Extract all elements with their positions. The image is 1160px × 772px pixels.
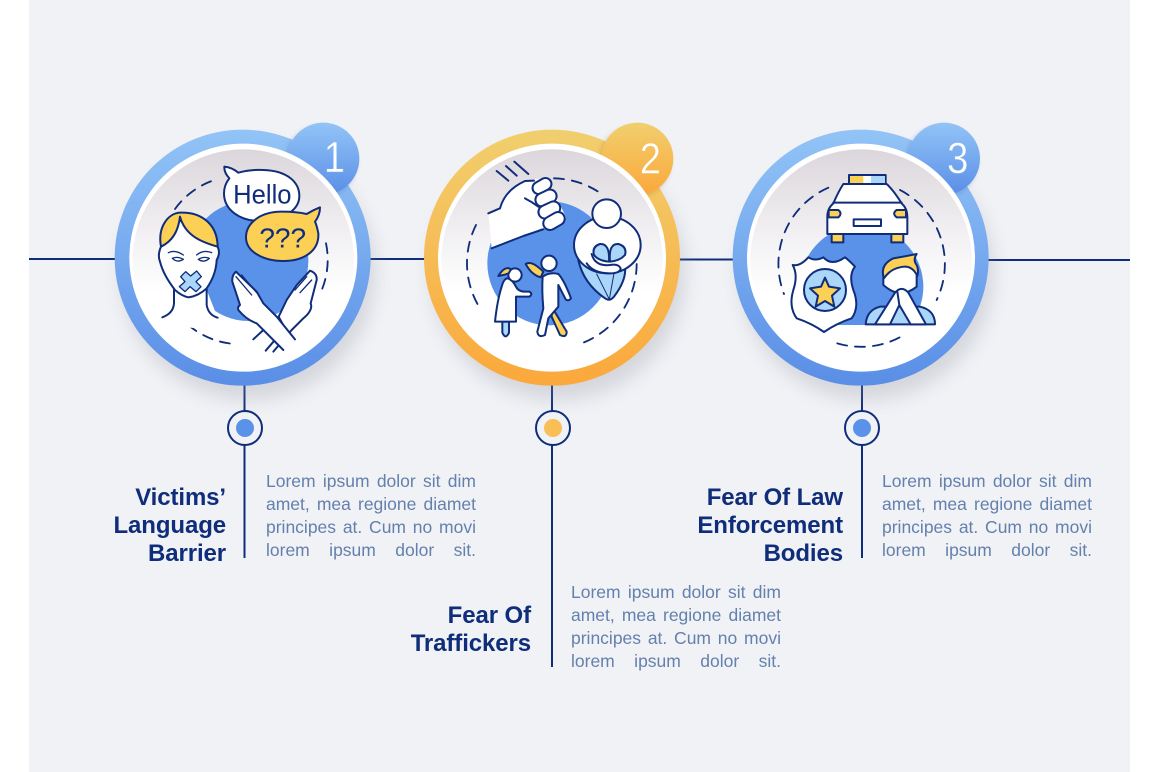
heading: Victims' Language Barrier: Language xyxy=(113,512,226,539)
text block 2: principes at. Cum no movi xyxy=(571,628,781,648)
heading: Fear Of Law Enforcement Bodies: Fear Of Law xyxy=(707,484,843,511)
text block 1: lorem ipsum dolor sit. xyxy=(266,540,476,560)
icon: Hello speech bubble xyxy=(224,167,299,221)
text block 1 xyxy=(266,471,476,560)
text block 1: amet, mea regione diamet xyxy=(266,494,476,514)
heading: Victims' Language Barrier xyxy=(113,484,226,567)
heading: Fear Of Law Enforcement Bodies: Enforcement xyxy=(697,512,843,539)
icon: Hello speech bubble: Hello xyxy=(233,180,291,210)
badge 3: 3 xyxy=(947,134,968,183)
heading: Fear Of Law Enforcement Bodies: Bodies xyxy=(764,540,843,567)
text block 3: Lorem ipsum dolor sit dim xyxy=(882,471,1092,491)
circle 1: language barrier xyxy=(115,123,375,400)
badge 1: 1 xyxy=(324,133,345,182)
badge 2 xyxy=(601,123,673,195)
icon: crying person xyxy=(866,254,935,324)
heading: Victims' Language Barrier: Barrier xyxy=(148,540,226,567)
text block 2 xyxy=(571,582,781,671)
text block 2: Lorem ipsum dolor sit dim xyxy=(571,582,781,602)
heading: Fear Of Law Enforcement Bodies xyxy=(697,484,844,567)
circle 3: fear of law enforcement xyxy=(733,123,993,400)
icon: police car xyxy=(827,175,907,242)
badge 1 xyxy=(287,123,359,195)
icon: silenced face xyxy=(159,213,219,330)
icon: raised fist xyxy=(488,162,567,248)
text block 1: Lorem ipsum dolor sit dim xyxy=(266,471,476,491)
text block 2: lorem ipsum dolor sit. xyxy=(571,651,781,671)
icon: hugging person xyxy=(574,199,641,300)
icon: crossed hands xyxy=(232,271,317,352)
node 1 xyxy=(228,411,262,445)
node 3 xyxy=(845,411,879,445)
circle 2: fear of traffickers xyxy=(424,123,685,400)
text block 3: principes at. Cum no movi xyxy=(882,517,1092,537)
icon: police badge xyxy=(791,257,856,332)
heading: Fear Of Traffickers: Fear Of xyxy=(448,602,531,629)
icon: man xyxy=(526,256,571,336)
text block 3 xyxy=(882,471,1092,560)
text block 1: principes at. Cum no movi xyxy=(266,517,476,537)
icon: question speech bubble xyxy=(246,207,320,261)
icon: woman xyxy=(495,268,531,336)
text block 3: lorem ipsum dolor sit. xyxy=(882,540,1092,560)
heading: Fear Of Traffickers xyxy=(411,602,532,657)
text block 2: amet, mea regione diamet xyxy=(571,605,781,625)
badge 2: 2 xyxy=(640,134,661,183)
badge 3 xyxy=(908,123,980,195)
icon: question speech bubble: ??? xyxy=(259,223,306,254)
text block 3: amet, mea regione diamet xyxy=(882,494,1092,514)
node 2 xyxy=(536,411,570,445)
connecting lines xyxy=(29,259,1130,667)
heading: Victims' Language Barrier: Victims’ xyxy=(135,484,226,511)
heading: Fear Of Traffickers: Traffickers xyxy=(411,630,531,657)
